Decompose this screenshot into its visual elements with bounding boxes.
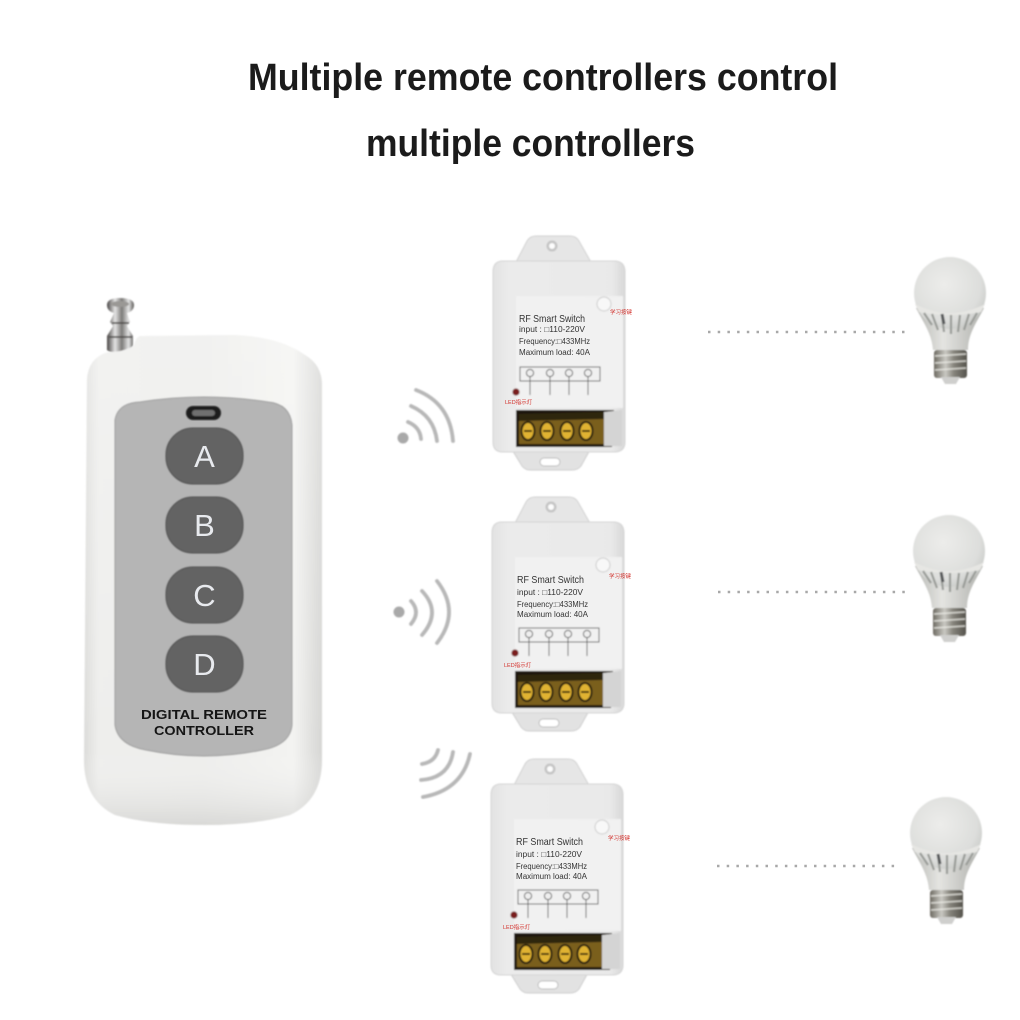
switch module middle: 学习按键 — [609, 572, 632, 580]
title: Multiple remote controllers control — [248, 57, 838, 99]
icon: wireless signal middle — [394, 581, 449, 643]
button C: C — [193, 578, 216, 613]
switch module top: Frequency:□433MHz — [519, 337, 590, 346]
button D — [166, 636, 243, 692]
dotted connector bottom — [717, 865, 897, 867]
switch module bottom: 学习按键 — [608, 834, 631, 842]
switch module bottom: input : □110-220V — [516, 850, 583, 859]
switch module bottom: LED指示灯 — [503, 923, 531, 931]
switch module top: RF Smart Switch — [519, 313, 585, 325]
button A: A — [194, 439, 215, 474]
remote body — [84, 335, 322, 825]
title: multiple controllers — [366, 123, 695, 165]
title — [248, 57, 838, 165]
dotted connector top — [708, 331, 908, 333]
button D: D — [193, 647, 216, 682]
switch module middle — [492, 497, 632, 731]
icon: wireless signal bottom — [421, 750, 470, 797]
icon: bulb bottom — [910, 797, 982, 924]
remote controller — [84, 298, 322, 825]
icon: antenna — [107, 298, 134, 355]
button B — [166, 497, 243, 553]
button B: B — [194, 508, 215, 543]
switch module top — [493, 236, 633, 470]
switch module middle: LED指示灯 — [504, 661, 532, 669]
switch module bottom: Maximum load: 40A — [516, 872, 588, 881]
dotted connector middle — [718, 591, 908, 593]
switch module bottom: RF Smart Switch — [516, 836, 583, 848]
switch module middle: Frequency:□433MHz — [517, 600, 588, 609]
icon: bulb middle — [913, 515, 985, 642]
remote label — [141, 708, 267, 738]
button C — [166, 567, 243, 623]
switch module middle: Maximum load: 40A — [517, 610, 589, 619]
grey panel — [115, 397, 292, 756]
switch module bottom: Frequency:□433MHz — [516, 862, 587, 871]
switch module top: LED指示灯 — [505, 398, 533, 406]
LED indicator — [186, 406, 221, 420]
switch module middle: RF Smart Switch — [517, 574, 584, 586]
icon: bulb top — [914, 257, 986, 384]
switch module top: 学习按键 — [610, 308, 633, 316]
switch module bottom — [491, 759, 631, 993]
icon: wireless signal top — [398, 390, 453, 444]
remote label: DIGITAL REMOTE — [141, 708, 267, 722]
switch module top: Maximum load: 40A — [519, 348, 591, 357]
switch module top: input : □110-220V — [519, 325, 586, 334]
button A — [166, 428, 243, 484]
switch module middle: input : □110-220V — [517, 588, 584, 597]
remote label: CONTROLLER — [154, 724, 254, 738]
